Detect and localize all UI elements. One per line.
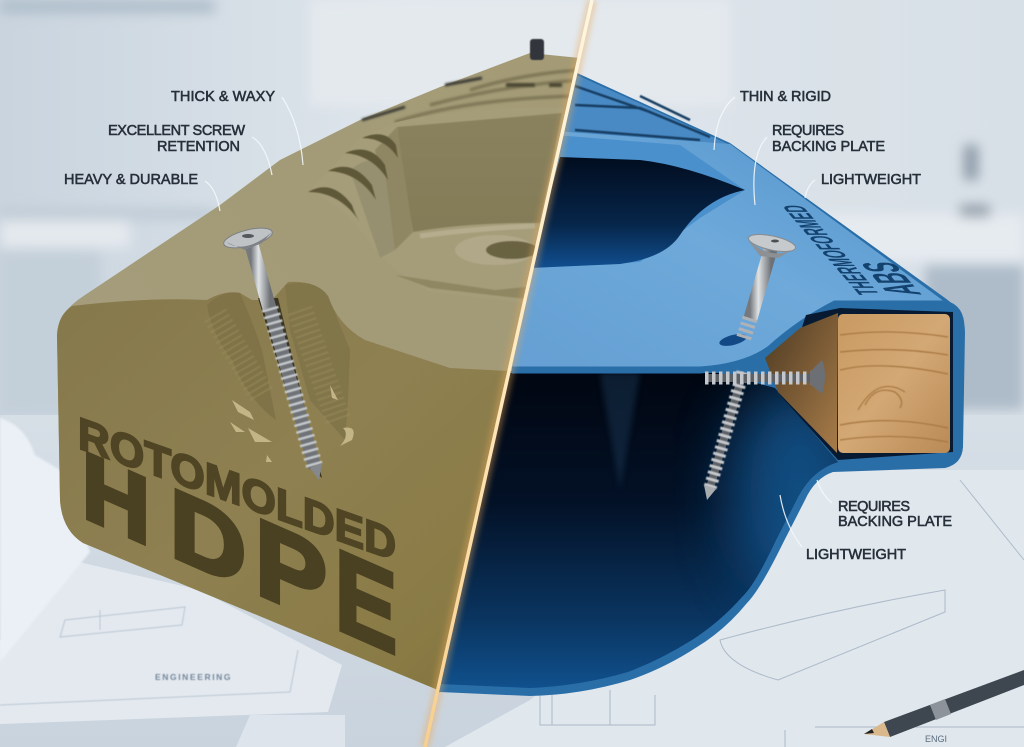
blueprint sheet left — [0, 560, 345, 747]
engraved title: HDPE: D — [170, 467, 246, 609]
callout: requires backing plate, upper: BACKING PLATE — [772, 139, 885, 155]
cleat — [530, 39, 544, 60]
callout: requires backing plate, lower: REQUIRES — [838, 499, 910, 515]
rolled paper left — [0, 418, 90, 662]
callout: excellent screw retention: RETENTION — [157, 139, 240, 155]
cockpit ribs — [308, 127, 413, 258]
callout: requires backing plate, upper — [754, 123, 885, 205]
icon: upper screw on ABS — [743, 231, 797, 340]
callout: thick and waxy: THICK & WAXY — [171, 89, 275, 105]
deck hole — [719, 334, 746, 346]
callout: thick and waxy — [171, 89, 303, 165]
callouts: HDPE properties — [64, 89, 303, 211]
lower interior — [441, 373, 838, 688]
table with blueprints — [0, 415, 1024, 747]
floor ledge and ring — [395, 226, 545, 300]
callout: heavy and durable: HEAVY & DURABLE — [64, 172, 198, 188]
divider: glowing line — [425, 0, 592, 747]
engraved title: HDPE: P — [255, 495, 327, 647]
callout: lightweight, lower: LIGHTWEIGHT — [806, 547, 906, 563]
engraved title: ROTOMOLDED: ROTOMOLDED — [78, 407, 396, 571]
deck surface — [505, 131, 945, 371]
callout: excellent screw retention — [108, 123, 272, 175]
cockpit opening — [530, 135, 745, 268]
wood block — [765, 308, 953, 460]
callout: thin and rigid: THIN & RIGID — [740, 89, 831, 105]
icon: pencil — [864, 670, 1024, 737]
callout: lightweight, upper — [805, 172, 921, 198]
panel: thermoformed ABS hull: ABS — [851, 262, 933, 295]
engraved title: HDPE: H — [82, 431, 150, 566]
callout: requires backing plate, lower: BACKING PLATE — [838, 514, 952, 530]
callout: requires backing plate, lower — [817, 480, 952, 530]
blueprint sheet right — [445, 470, 1024, 747]
panel: thermoformed ABS hull — [420, 72, 965, 700]
front face — [57, 282, 530, 710]
icon: lower screw through wood — [704, 360, 825, 500]
blueprint sheet right: ENGI — [925, 734, 947, 744]
callout: thin and rigid — [714, 89, 831, 150]
callout: lightweight, lower — [780, 495, 906, 563]
icon: screw in HDPE — [222, 224, 322, 480]
hull outer shell — [420, 72, 965, 700]
callout: excellent screw retention: EXCELLENT SCREW — [108, 123, 245, 139]
callout: heavy and durable — [64, 172, 220, 211]
bow deck with lashing — [560, 72, 730, 145]
callout: lightweight, upper: LIGHTWEIGHT — [821, 172, 921, 188]
callout: requires backing plate, upper: REQUIRES — [772, 123, 844, 139]
panel: rotomolded HDPE hull — [57, 39, 610, 710]
torn plastic around screw — [207, 283, 354, 478]
cockpit well — [308, 113, 562, 298]
engraved title: HDPE: E — [335, 525, 397, 679]
rim highlight — [512, 300, 964, 374]
deck ridges at bow — [362, 70, 580, 122]
callouts: ABS properties — [714, 89, 952, 563]
hull silhouette and deck — [57, 53, 610, 705]
panel: thermoformed ABS hull: THERMOFORMED — [776, 205, 887, 295]
blueprint sheet left: ENGINEERING — [155, 672, 232, 682]
